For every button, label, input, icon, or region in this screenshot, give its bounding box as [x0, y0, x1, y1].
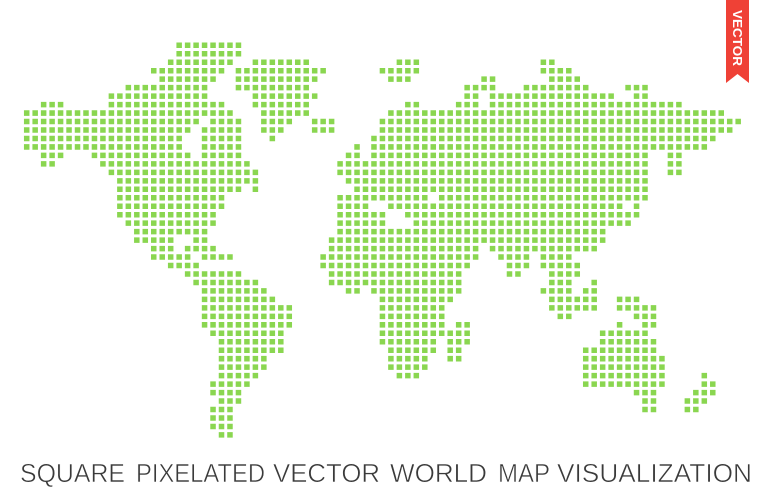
- map region: North Atlantic island: [312, 122, 337, 130]
- title: MAP: [498, 458, 550, 488]
- map region: Australia and New Guinea: [583, 299, 668, 410]
- ribbon badge: VECTOR: [726, 0, 749, 83]
- map region: Greenland: [236, 62, 329, 138]
- title: VECTOR: [273, 458, 380, 488]
- map region: South America: [185, 274, 295, 435]
- map region: Iceland: [380, 62, 422, 79]
- dotted world map: [24, 45, 744, 435]
- map region: Eurasia and Africa: [320, 62, 744, 376]
- title: [20, 458, 752, 488]
- ribbon badge: VECTOR: VECTOR: [730, 10, 745, 67]
- title: WORLD: [390, 458, 487, 488]
- title: PIXELATED: [136, 458, 265, 488]
- title: VISUALIZATION: [557, 458, 752, 488]
- map region: New Zealand: [685, 376, 718, 410]
- title: SQUARE: [20, 458, 125, 488]
- map region: North and Central America: [24, 45, 261, 266]
